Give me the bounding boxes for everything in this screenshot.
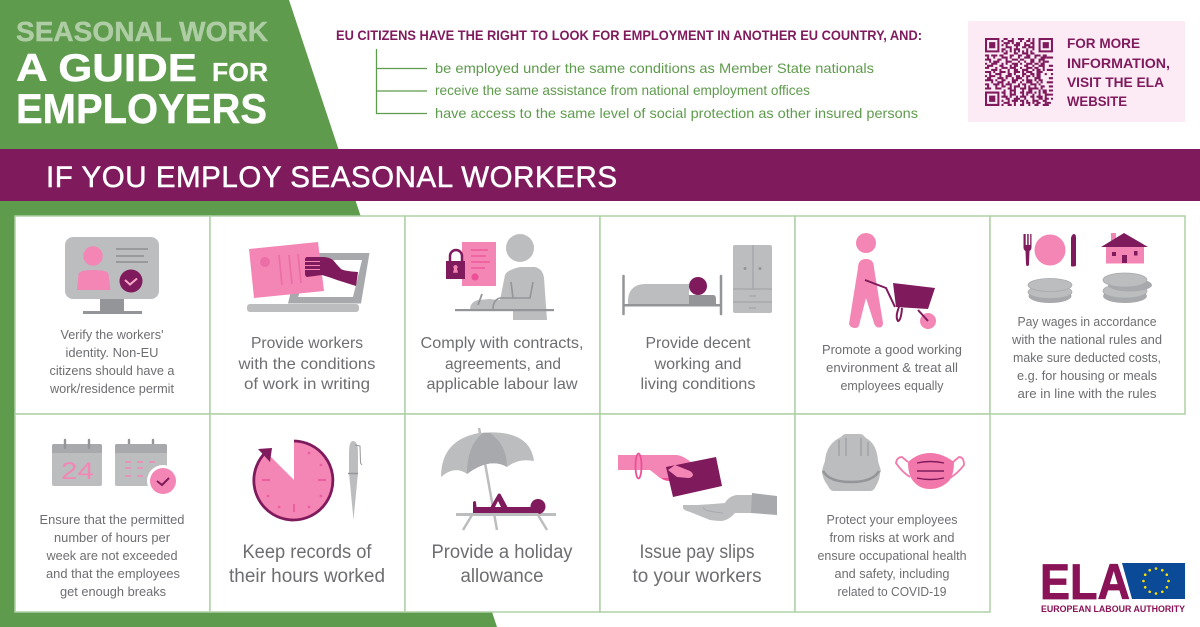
title — [16, 16, 268, 132]
text: working and — [653, 356, 742, 373]
text — [822, 342, 962, 393]
text: their hours worked — [229, 566, 385, 587]
website link text — [1067, 35, 1170, 109]
text: Protect your employees — [826, 512, 958, 527]
panel: holiday allowance — [405, 414, 600, 612]
text: employees equally — [840, 378, 944, 393]
text: with the conditions — [237, 356, 376, 373]
text: Provide decent — [646, 335, 751, 352]
text: to your workers — [632, 566, 762, 587]
title: FOR — [212, 57, 268, 87]
text — [640, 335, 756, 393]
text: are in line with the rules — [1018, 386, 1157, 401]
text: Pay wages in accordance — [1018, 314, 1156, 329]
icon: worker with wheelbarrow — [849, 233, 936, 329]
text: Verify the workers' — [60, 327, 164, 342]
panel: decent conditions — [600, 216, 795, 414]
website link text: WEBSITE — [1067, 93, 1127, 109]
panel: verify identity — [15, 216, 210, 414]
text: environment & treat all — [826, 360, 958, 375]
text — [40, 512, 184, 599]
section banner — [0, 149, 1200, 201]
text: Keep records of — [242, 542, 372, 563]
text: applicable labour law — [426, 376, 578, 393]
text: of work in writing — [244, 376, 370, 393]
rights list: receive the same assistance from national employment offices — [435, 82, 810, 98]
panel: pay slips — [600, 414, 795, 612]
panel: good working environment — [795, 216, 990, 414]
text: Comply with contracts, — [420, 335, 584, 352]
rights list: have access to the same level of social protection as other insured persons — [435, 105, 918, 121]
logo: European Labour Authority: ELA — [1040, 554, 1130, 610]
icon: bed and wardrobe — [623, 245, 772, 314]
text: agreements, and — [445, 356, 561, 373]
website link text: FOR MORE — [1067, 35, 1140, 51]
text — [420, 335, 584, 393]
icon: parasol and sunbather — [441, 428, 556, 530]
QR code — [985, 38, 1053, 106]
text — [237, 335, 376, 393]
panel: comply with contracts — [405, 216, 600, 414]
text: allowance — [460, 566, 544, 587]
logo: European Labour Authority — [1040, 554, 1185, 614]
text: Provide a holiday — [432, 542, 573, 563]
text: with the national rules and — [1011, 332, 1162, 347]
panel: conditions in writing — [210, 216, 405, 414]
panel: health and safety — [795, 414, 990, 612]
intro heading: EU CITIZENS HAVE THE RIGHT TO LOOK FOR EMPLOYMENT IN ANOTHER EU COUNTRY, AND: — [336, 27, 922, 43]
rights list: be employed under the same conditions as Member State nationals — [435, 60, 874, 76]
title: SEASONAL WORK — [16, 16, 268, 47]
text — [632, 542, 762, 587]
text: citizens should have a — [50, 363, 175, 378]
text: Provide workers — [251, 335, 363, 352]
text: week are not exceeded — [46, 548, 177, 563]
green background shape — [0, 0, 497, 627]
website link text: VISIT THE ELA — [1067, 74, 1164, 90]
panel: records of hours — [210, 414, 405, 612]
text: Issue pay slips — [640, 542, 754, 563]
section banner: IF YOU EMPLOY SEASONAL WORKERS — [46, 161, 617, 194]
text: living conditions — [640, 376, 756, 393]
website link text: INFORMATION, — [1067, 55, 1170, 71]
panel: wages — [990, 216, 1185, 414]
title: A GUIDE — [16, 47, 197, 90]
logo: European Labour Authority: EUROPEAN LABOUR AUTHORITY — [1041, 604, 1185, 614]
icon: monitor with ID — [65, 237, 159, 314]
title: EMPLOYERS — [16, 85, 267, 132]
rights list — [376, 49, 918, 121]
text — [49, 327, 175, 396]
icon: calendars — [52, 440, 179, 497]
icon: meals, housing and coins — [1024, 233, 1152, 303]
text: and safety, including — [834, 566, 950, 581]
text: related to COVID-19 — [838, 584, 946, 599]
icon: person signing with lock — [446, 234, 554, 320]
text: Promote a good working — [822, 342, 962, 357]
icon: hands passing pay slip — [618, 454, 777, 521]
text — [818, 512, 966, 599]
text — [229, 542, 385, 587]
text: work/residence permit — [49, 381, 174, 396]
text: number of hours per — [54, 530, 171, 545]
text: identity. Non-EU — [66, 345, 158, 360]
icon: helmet and mask — [822, 434, 964, 491]
text: and that the employees — [46, 566, 180, 581]
icon: calendars: 24 — [61, 458, 94, 485]
text: get enough breaks — [60, 584, 166, 599]
text: make sure deducted costs, — [1013, 350, 1161, 365]
panel: more information — [968, 21, 1185, 122]
text: e.g. for housing or meals — [1017, 368, 1157, 383]
icon: clock and pen — [254, 441, 362, 520]
text — [1011, 314, 1162, 401]
text: Ensure that the permitted — [40, 512, 184, 527]
text — [432, 542, 573, 587]
icon: document from laptop — [247, 242, 370, 312]
text: from risks at work and — [830, 530, 954, 545]
panel: permitted hours — [15, 414, 210, 612]
text: ensure occupational health — [818, 548, 966, 563]
